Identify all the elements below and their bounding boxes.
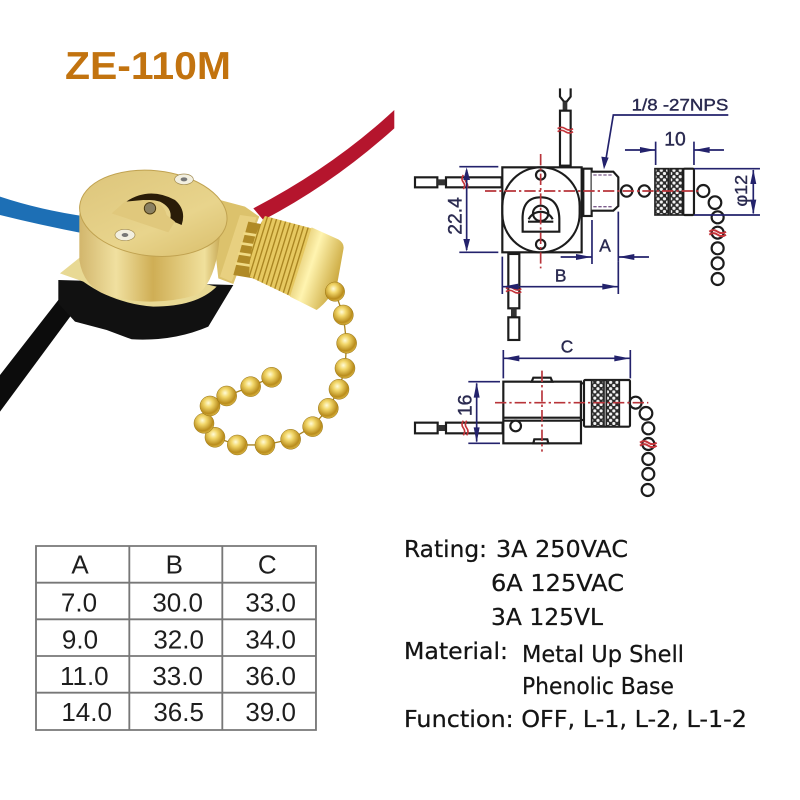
table values: 36.0 — [245, 661, 296, 691]
dimension C — [503, 337, 630, 378]
specifications text: Material: — [404, 637, 508, 665]
center lines — [495, 371, 648, 452]
chain and knob — [621, 169, 726, 285]
cap end — [290, 227, 344, 310]
table values: C — [258, 550, 277, 580]
specifications text: Rating: — [404, 535, 487, 563]
table values: 34.0 — [245, 624, 296, 654]
specifications text: 3A 250VAC — [496, 535, 628, 563]
specifications text: Metal Up Shell — [522, 640, 684, 668]
dimension table — [36, 546, 316, 730]
dimension 10: 10 — [664, 129, 686, 150]
specifications text: Phenolic Base — [522, 672, 674, 700]
dimension 10 — [625, 129, 724, 165]
table values: 9.0 — [62, 624, 98, 654]
rivets — [115, 174, 193, 241]
dimension 22.4: 22.4 — [445, 197, 466, 235]
left wire — [415, 421, 503, 435]
table values: A — [71, 550, 89, 580]
specifications text — [404, 535, 747, 733]
slot and lever — [112, 194, 183, 232]
bead chain — [194, 282, 357, 455]
bottom wire — [506, 254, 521, 340]
table grid — [36, 546, 316, 730]
switch body — [502, 167, 582, 252]
technical drawing: side view — [415, 337, 657, 496]
dimension diameter 12: φ12 — [731, 175, 751, 206]
chain — [630, 397, 657, 496]
dimension A — [561, 212, 649, 264]
mounting holes — [536, 170, 545, 249]
knob — [581, 380, 630, 427]
top wire — [558, 88, 573, 166]
table values: 33.0 — [152, 661, 203, 691]
table values — [60, 550, 296, 727]
title: ZE-110M — [65, 45, 231, 88]
specifications text: Function: OFF, L-1, L-2, L-1-2 — [404, 705, 747, 733]
switch body top — [75, 163, 231, 263]
table values: 36.5 — [153, 697, 204, 727]
table values: 32.0 — [153, 624, 204, 654]
switch body side — [79, 213, 227, 302]
dimension A: A — [599, 236, 611, 256]
dimension 16 — [455, 382, 500, 443]
black wire — [0, 300, 80, 412]
red wire — [253, 110, 394, 220]
dimension diameter 12 — [694, 169, 760, 215]
dimension 22.4 — [445, 167, 498, 252]
specifications text: 3A 125VL — [491, 603, 603, 631]
specifications text: 6A 125VAC — [491, 569, 624, 597]
table values: 14.0 — [61, 697, 112, 727]
body circle — [502, 167, 580, 252]
table values: 11.0 — [60, 661, 109, 691]
product photo: pull chain switch — [0, 110, 394, 455]
dimension C: C — [561, 337, 573, 357]
dimension B — [502, 257, 618, 294]
technical drawing: front view — [415, 88, 760, 340]
center pivot — [523, 197, 559, 232]
table values: 39.0 — [245, 697, 296, 727]
table values: B — [166, 550, 183, 580]
body — [503, 378, 581, 443]
thread callout — [601, 96, 728, 169]
beige plate — [60, 256, 217, 307]
blue wire — [0, 197, 87, 234]
black phenolic base — [58, 280, 233, 340]
table values: 30.0 — [152, 588, 203, 618]
table values: 7.0 — [61, 588, 97, 618]
threaded bushing — [583, 169, 618, 216]
thread callout: 1/8 -27NPS — [632, 96, 728, 115]
center lines — [485, 154, 700, 268]
dimension 16: 16 — [455, 395, 476, 416]
table values: 33.0 — [245, 588, 296, 618]
dimension B: B — [555, 266, 566, 286]
cap knurled section — [249, 216, 312, 298]
threaded neck and hex nut — [213, 200, 267, 284]
left wire — [415, 175, 502, 189]
